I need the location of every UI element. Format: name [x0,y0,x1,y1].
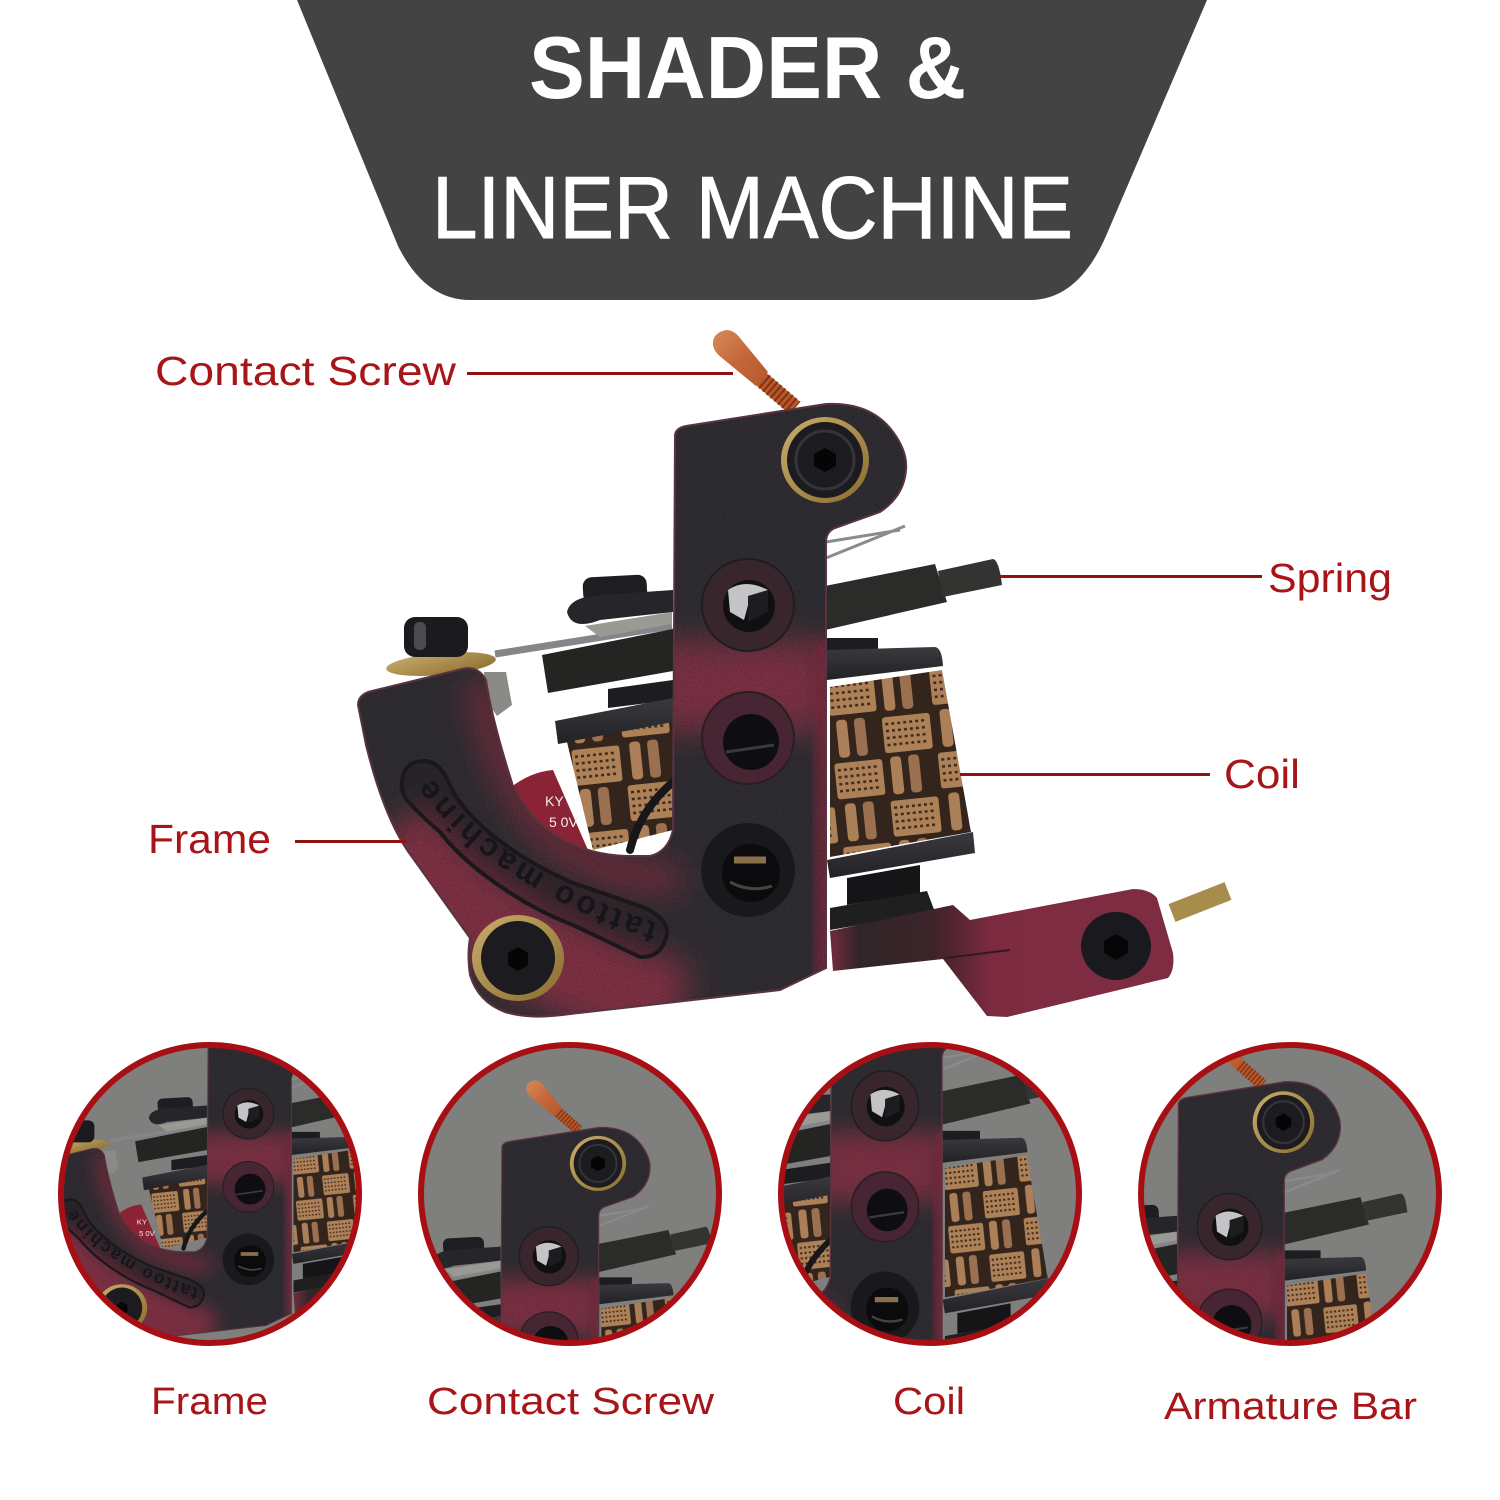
tail screw hex [1104,934,1128,960]
armature rear bar [542,629,673,693]
frame [340,390,940,1030]
tail screw [1081,912,1151,980]
detail circle: contact screw [418,1042,722,1346]
title line 2: LINER MACHINE [432,158,1073,257]
callout: contact screw: Contact Screw [155,348,456,394]
spring [495,526,905,654]
detail circle: coil [778,1042,1082,1346]
caption: contact screw: Contact Screw [427,1381,715,1423]
callout: coil: Coil [1224,751,1300,797]
title line 1: SHADER & [529,18,966,117]
coil base plate [830,891,935,930]
capacitor: KY [545,793,564,809]
post and rear screw [385,617,512,716]
lower screw [472,915,564,1001]
caption: coil: Coil [893,1381,965,1423]
callout: coil [960,751,1300,797]
top screw [781,417,869,503]
title banner [297,0,1207,300]
rear coil [555,680,673,850]
frame holes [701,559,795,917]
callout: frame [148,816,406,862]
engraved nameplate: tattoo machine [422,781,655,942]
caption: armature bar: Armature Bar [1164,1386,1417,1428]
capacitor: 5 0V [549,814,578,830]
contact screw [713,330,795,408]
callout: contact screw [155,348,733,394]
rear binding screw [567,574,673,637]
armature tail [830,889,1173,1017]
detail circle: frame [58,1042,362,1346]
detail circle: armature bar [1138,1042,1442,1346]
front coil [820,638,980,905]
callout: spring [1000,555,1392,601]
armature front bar [825,559,1002,630]
tattoo machine illustration [357,330,1266,1070]
capacitor [510,770,588,850]
wire [630,782,673,850]
callout: frame: Frame [148,816,271,862]
caption: frame: Frame [151,1381,268,1423]
callout: spring: Spring [1268,555,1392,601]
brass pin [1172,891,1228,913]
